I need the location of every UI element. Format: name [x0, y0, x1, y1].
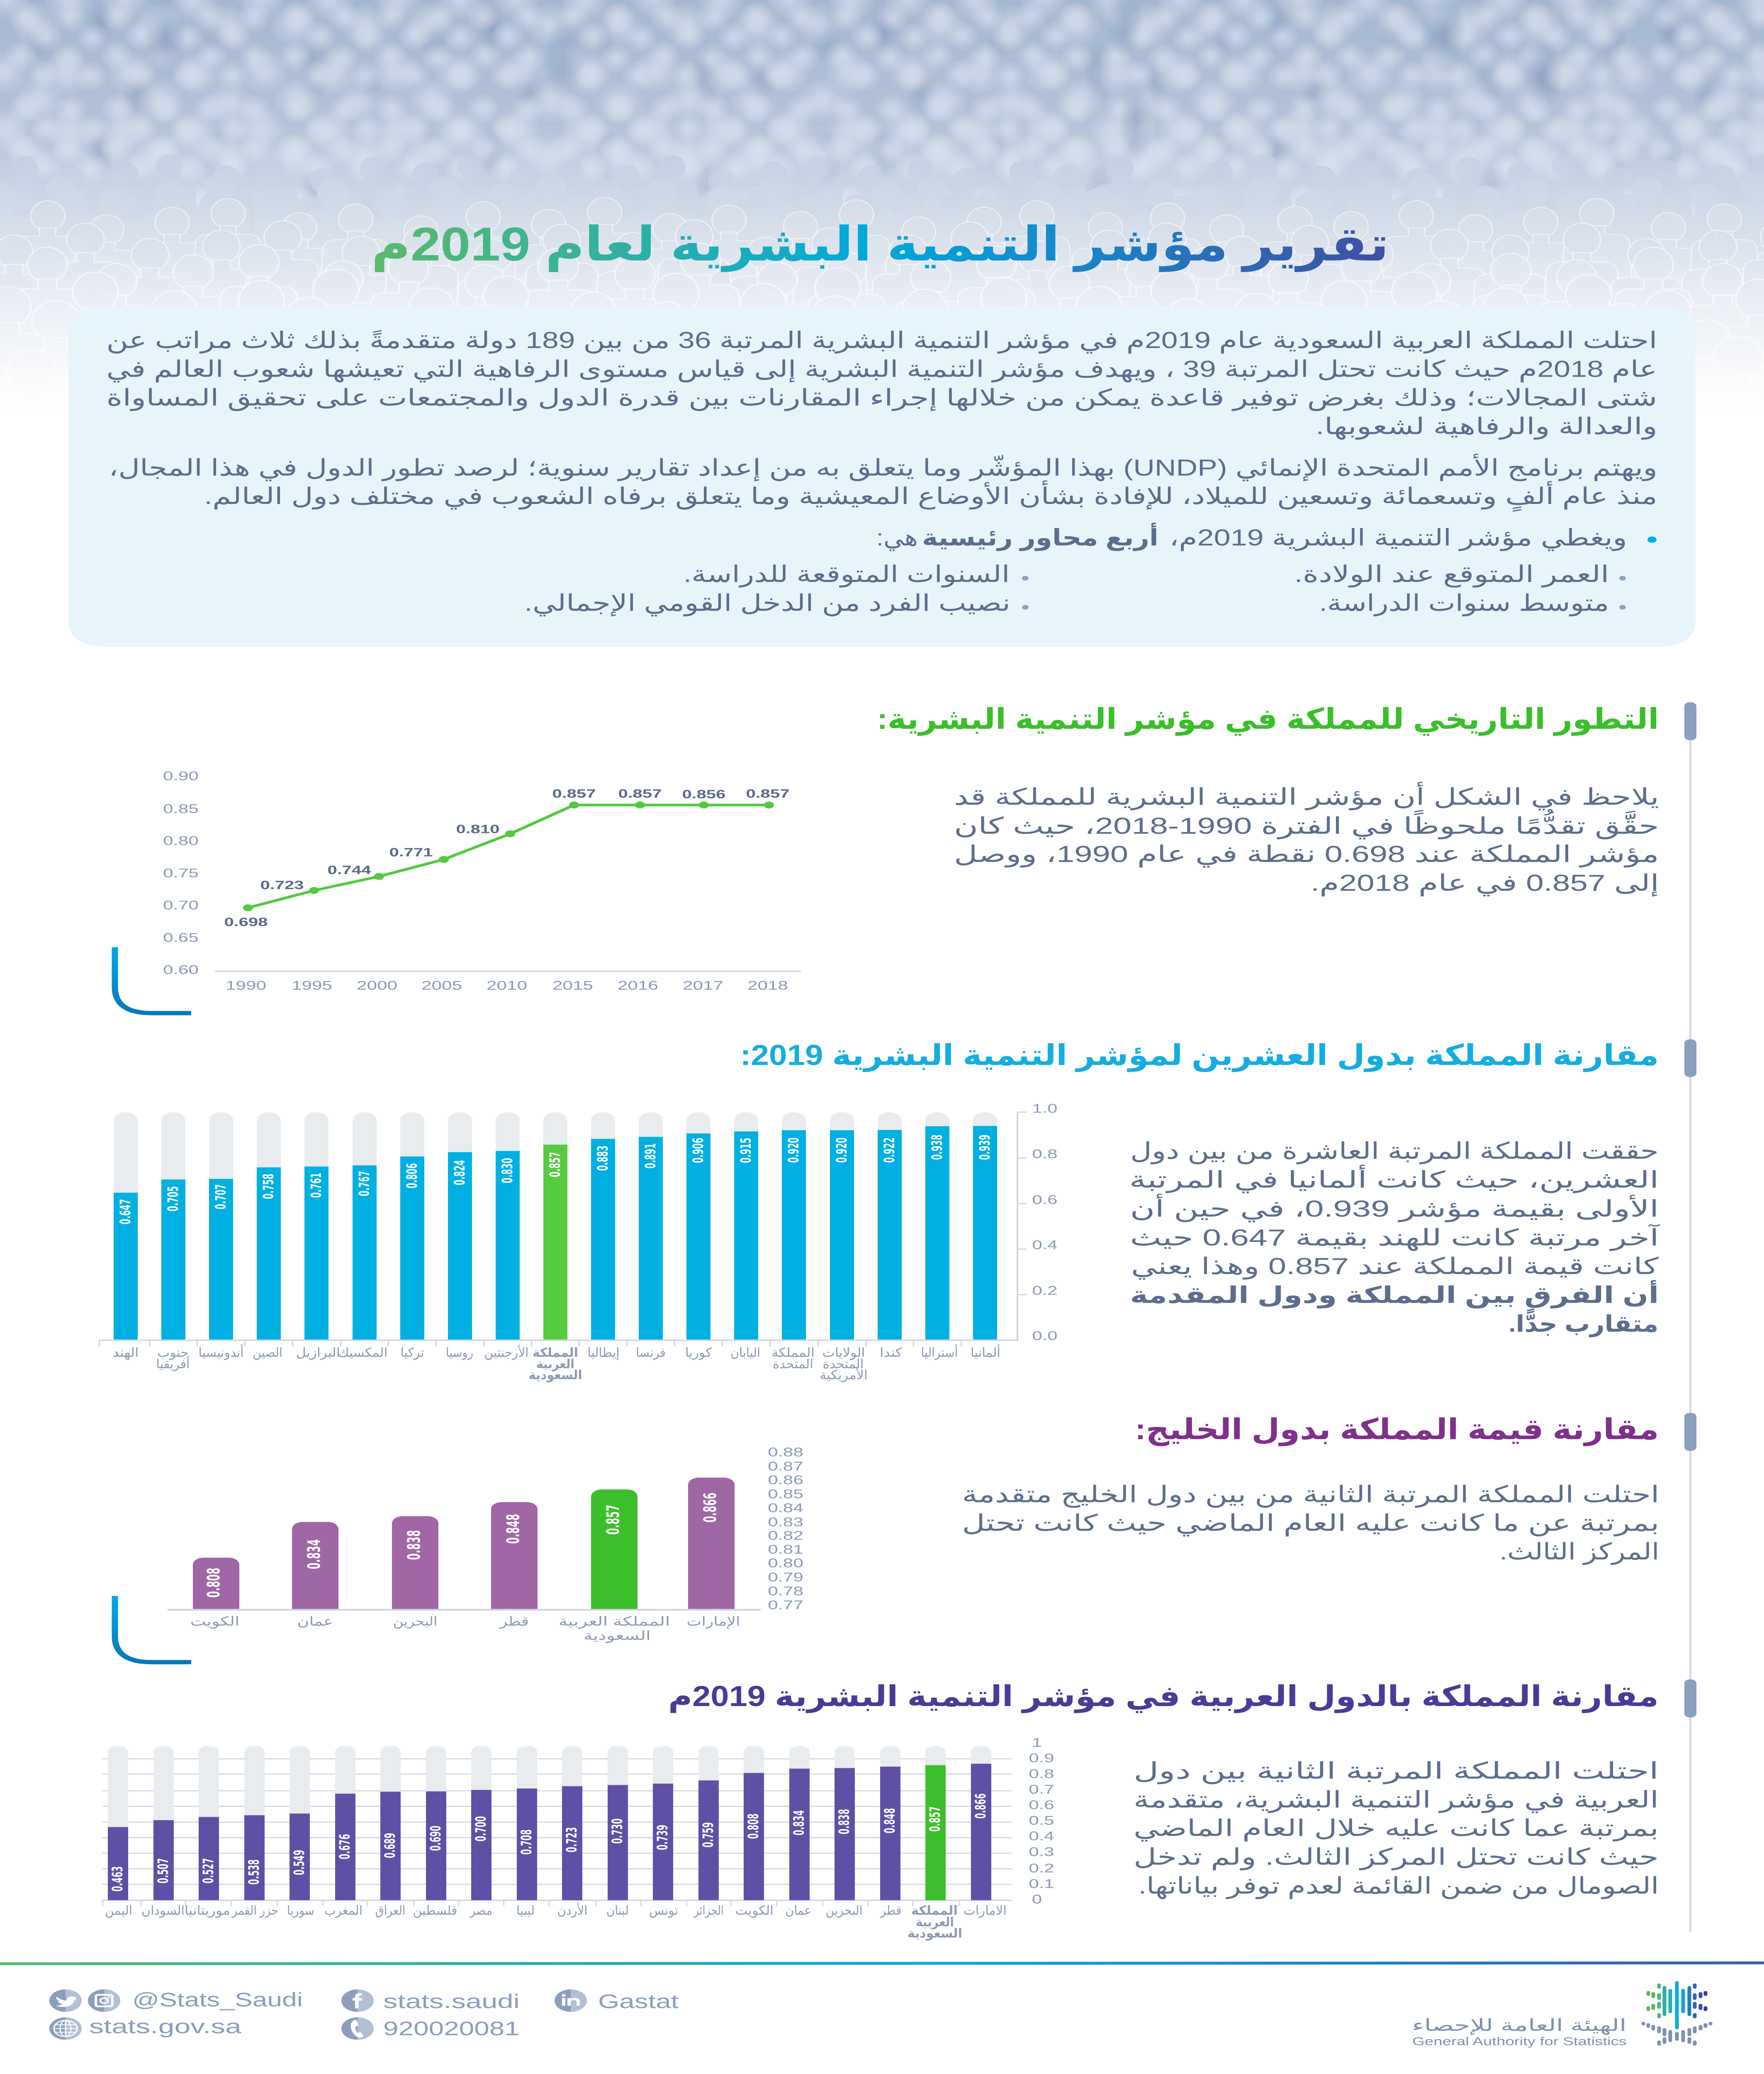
data labels — [224, 786, 790, 929]
section 4 text: الصومال من ضمن القائمة لعدم توفر بياناتها. — [1138, 1873, 1659, 1899]
country labels: المكسيك — [338, 1346, 388, 1360]
paragraph 1: احتلت المملكة العربية السعودية عام 2019م في مؤشر التنمية البشرية المرتبة 36 من بين 189 دولة متقدمةً بذلك ثلاث مراتب عن — [106, 327, 1657, 354]
section 4 text: العربية في مؤشر التنمية البشرية، متقدمة — [1134, 1787, 1659, 1813]
bar value labels: 0.730 — [609, 1818, 626, 1844]
country labels: اليابان — [730, 1346, 760, 1360]
y axis labels — [768, 1445, 803, 1612]
country labels: الكويت — [190, 1614, 239, 1629]
country labels: قطر — [499, 1614, 529, 1629]
bar value labels: 0.838 — [836, 1809, 853, 1834]
icon: phone — [341, 2017, 374, 2040]
country labels: الأمريكية — [820, 1367, 868, 1383]
bar value labels: 0.690 — [428, 1826, 444, 1851]
y axis labels: 0 — [1032, 1893, 1042, 1906]
list of four axes — [524, 561, 1626, 616]
icon: globe — [49, 2017, 82, 2040]
bar value labels: 0.723 — [564, 1827, 580, 1852]
section 4 text — [1134, 1758, 1659, 1899]
bar value labels: 0.939 — [977, 1134, 993, 1160]
y axis labels: 0.2 — [1032, 1284, 1058, 1298]
country labels: المغرب — [324, 1904, 363, 1918]
section 3 bar chart: Gulf states — [168, 1445, 803, 1643]
country labels: البحرين — [826, 1904, 863, 1918]
country labels: عمان — [786, 1904, 811, 1918]
icon: instagram — [88, 1989, 120, 2012]
country labels: المملكة العربية — [559, 1614, 670, 1629]
bar value labels: 0.915 — [738, 1138, 754, 1163]
y axis labels: 0.82 — [768, 1529, 803, 1543]
country labels: الإمارات — [687, 1614, 740, 1629]
country labels: السودان — [141, 1904, 185, 1918]
bar value labels: 0.906 — [690, 1138, 707, 1163]
country labels: قطر — [880, 1904, 901, 1918]
country labels: الأرجنتين — [484, 1344, 528, 1360]
section 2 text: آخر مرتبة كانت للهند بقيمة 0.647 حيث — [1130, 1224, 1660, 1251]
section 4 text: احتلت المملكة المرتبة الثانية بين دول — [1134, 1758, 1659, 1784]
bar value labels: 0.707 — [213, 1184, 229, 1210]
section 1 text — [954, 781, 1659, 896]
section 4 text: حيث كانت تحتل المركز الثالث. ولم تدخل — [1134, 1844, 1659, 1870]
section 2 bar chart: G20 — [99, 1102, 1058, 1383]
y axis labels: 0.5 — [1029, 1814, 1054, 1828]
country labels: الولايات — [822, 1346, 865, 1360]
section 4 marker — [1684, 1680, 1696, 1717]
text: facebook handle: stats.saudi — [383, 1991, 520, 2013]
country labels — [190, 1614, 740, 1643]
bar value labels: 0.857 — [603, 1505, 623, 1535]
icon: twitter — [49, 1989, 82, 2012]
y axis labels: 0.2 — [1029, 1862, 1054, 1876]
bar value labels: 0.938 — [929, 1134, 946, 1160]
country labels: إيطاليا — [587, 1346, 619, 1360]
bar value labels: 0.761 — [308, 1173, 325, 1198]
country labels: عمان — [297, 1614, 333, 1629]
y axis labels: 0.4 — [1029, 1829, 1054, 1843]
y axis labels: 0.6 — [1032, 1193, 1058, 1207]
country labels: العربية — [536, 1357, 574, 1371]
x axis labels: 1990 — [226, 979, 266, 993]
logo: General Authority for Statistics — [1412, 1982, 1710, 2048]
country labels: الامارات — [964, 1904, 1007, 1918]
y axis labels: 0.85 — [768, 1487, 803, 1501]
bar value labels: 0.883 — [595, 1146, 611, 1171]
bar value labels: 0.806 — [404, 1163, 421, 1188]
y axis labels: 0.4 — [1032, 1238, 1058, 1252]
section 4 bar chart: Arab states — [102, 1736, 1054, 1940]
y axis labels: 0.86 — [768, 1473, 803, 1487]
text: twitter and instagram handle: @Stats_Saudi — [132, 1989, 303, 2011]
blue corner bracket 1 — [115, 947, 191, 1013]
country labels: المملكة — [911, 1904, 958, 1918]
y axis labels: 0.77 — [768, 1598, 803, 1612]
section 2 text — [1129, 1138, 1660, 1337]
icon: facebook — [341, 1989, 374, 2012]
country labels: سوريا — [287, 1904, 314, 1918]
bar value labels: 0.891 — [642, 1143, 659, 1168]
y axis labels: 0.8 — [1029, 1767, 1054, 1781]
country labels: كندا — [880, 1346, 903, 1360]
section 2 text: الأولى بقيمة مؤشر 0.939، في حين أن — [1130, 1193, 1659, 1222]
bar value labels: 0.866 — [700, 1492, 720, 1523]
paragraph 1: شتى المجالات؛ وذلك بغرض توفير قاعدة يمكن من خلالها إجراء المقارنات بين قدرة الدول والمجتمعات على تحقيق المساواة — [107, 385, 1657, 411]
footer: social contacts — [49, 1989, 679, 2040]
section 1 marker — [1684, 702, 1696, 740]
bar value labels: 0.830 — [499, 1158, 516, 1183]
bar value labels: 0.676 — [337, 1834, 353, 1859]
section 1 text: إلى 0.857 في عام 2018م. — [1311, 870, 1659, 896]
title: تقرير مؤشر التنمية البشرية لعام 2019م — [371, 218, 1389, 272]
value bars — [114, 1126, 997, 1340]
country labels: روسيا — [446, 1346, 473, 1360]
bar value labels: 0.759 — [700, 1822, 717, 1848]
section 1 text: يلاحظ في الشكل أن مؤشر التنمية البشرية للمملكة قد — [954, 781, 1659, 811]
data labels: 0.857 — [552, 786, 596, 801]
y axis labels: 0.87 — [768, 1459, 803, 1473]
country labels: فرنسا — [636, 1346, 666, 1360]
icon: linkedin — [555, 1989, 587, 2012]
country labels: أستراليا — [921, 1344, 958, 1360]
logo Arabic name: الهيئة العامة للإحصاء — [1412, 2016, 1627, 2035]
x axis labels: 2017 — [683, 979, 723, 993]
y axis labels: 0.80 — [163, 834, 199, 848]
list of four axes: العمر المتوقع عند الولادة. — [1294, 561, 1609, 588]
y axis labels: 0.9 — [1029, 1751, 1054, 1765]
x axis labels: 2015 — [552, 979, 593, 993]
section 3 text: المركز الثالث. — [1500, 1538, 1659, 1565]
bar value labels: 0.866 — [973, 1793, 989, 1819]
country labels: الكويت — [735, 1904, 774, 1918]
country labels — [113, 1344, 1000, 1383]
country labels: تونس — [649, 1904, 678, 1918]
y axis labels: 1.0 — [1032, 1102, 1058, 1116]
section 2 text: العشرين، حيث كانت ألمانيا في المرتبة — [1129, 1164, 1659, 1193]
y axis labels — [1029, 1736, 1054, 1906]
y axis labels — [163, 769, 199, 977]
y axis labels: 0.3 — [1029, 1845, 1054, 1859]
y axis labels: 0.7 — [1029, 1783, 1054, 1796]
bar value labels: 0.808 — [203, 1568, 224, 1598]
text: linkedin handle: Gastat — [598, 1991, 679, 2013]
country labels: البحرين — [393, 1614, 437, 1629]
x axis labels: 2000 — [357, 979, 397, 993]
data labels: 0.771 — [389, 845, 433, 859]
bar value labels: 0.857 — [927, 1806, 944, 1832]
grey bar tracks — [114, 1112, 997, 1340]
bar value labels: 0.708 — [518, 1829, 535, 1855]
y axis labels: 0.6 — [1029, 1798, 1054, 1812]
country labels: المملكة — [533, 1346, 578, 1360]
bar value labels: 0.758 — [260, 1174, 277, 1199]
bar value labels: 0.538 — [246, 1859, 263, 1884]
y axis labels: 0.60 — [163, 963, 199, 977]
axes and ticks — [99, 1112, 1027, 1346]
bar value labels: 0.857 — [547, 1152, 564, 1177]
x axis labels — [226, 979, 788, 993]
country labels: الهند — [113, 1346, 139, 1360]
data labels: 0.723 — [260, 878, 304, 892]
background: crowd of people silhouettes — [0, 0, 1764, 525]
section 1 text: مؤشر المملكة عند 0.698 نقطة في عام 1990، ووصل — [954, 841, 1659, 868]
country labels: ألمانيا — [971, 1344, 1000, 1360]
section 2 marker — [1684, 1039, 1696, 1077]
country labels — [105, 1902, 1007, 1940]
country labels: جنوب — [157, 1346, 189, 1360]
bar value labels: 0.848 — [503, 1514, 523, 1544]
grey bar tracks — [108, 1746, 991, 1900]
section 2 text: كانت قيمة المملكة عند 0.857 وهذا يعني — [1131, 1254, 1659, 1280]
blue corner bracket 2 — [115, 1596, 191, 1662]
bar value labels: 0.463 — [109, 1866, 126, 1891]
bar value labels: 0.689 — [382, 1833, 399, 1858]
y axis labels: 0.85 — [163, 802, 199, 816]
list of four axes: نصيب الفرد من الدخل القومي الإجمالي. — [524, 590, 1010, 616]
country labels: الصين — [253, 1346, 282, 1360]
y axis labels: 0.90 — [163, 769, 199, 783]
bar value labels — [109, 1793, 989, 1891]
bars — [193, 1478, 735, 1609]
bar value labels — [203, 1492, 720, 1598]
country labels: مصر — [470, 1904, 492, 1918]
panel: introduction — [68, 306, 1696, 647]
country labels: موريتانيا — [185, 1904, 230, 1918]
bar value labels: 0.808 — [745, 1814, 762, 1839]
y axis labels — [1032, 1102, 1058, 1343]
y axis labels: 0.65 — [163, 931, 199, 945]
y axis labels: 0.84 — [768, 1501, 803, 1515]
section 2 text: متقارب جدًّا. — [1509, 1308, 1659, 1337]
bar value labels: 0.705 — [165, 1186, 182, 1211]
footer gradient band — [0, 1962, 1764, 1965]
y axis labels: 0.8 — [1032, 1147, 1058, 1161]
country labels: المملكة — [771, 1346, 815, 1360]
country labels: أندونيسيا — [199, 1344, 244, 1360]
x axis labels: 1995 — [292, 979, 332, 993]
text: phone number: 920020081 — [383, 2018, 520, 2040]
y axis labels: 0.0 — [1032, 1329, 1058, 1343]
bar value labels: 0.507 — [155, 1858, 172, 1884]
country labels: اليمن — [105, 1904, 132, 1918]
bullet: four main axes: ويغطي مؤشر التنمية البشرية 2019م، — [1169, 525, 1627, 551]
bar value labels: 0.700 — [473, 1816, 489, 1841]
bar value labels: 0.838 — [404, 1530, 424, 1560]
paragraph 2: ويهتم برنامج الأمم المتحدة الإنمائي (UNDP) بهذا المؤشّر وما يتعلق به من إعداد تقارير سنوية؛ لرصد تطور الدول في هذا المجال، — [109, 453, 1657, 481]
bar value labels: 0.848 — [882, 1808, 898, 1833]
y axis labels: 0.78 — [768, 1584, 803, 1598]
country labels: أفريقيا — [156, 1356, 190, 1372]
bar value labels: 0.834 — [304, 1539, 324, 1569]
logo mark — [1643, 1982, 1710, 2045]
country labels: تركيا — [401, 1346, 424, 1360]
bar value labels: 0.922 — [881, 1137, 898, 1163]
bar value labels: 0.527 — [200, 1858, 217, 1884]
text: website: stats.gov.sa — [89, 2016, 242, 2037]
list of four axes: السنوات المتوقعة للدراسة. — [683, 561, 1010, 588]
country labels: جزر القمر — [231, 1904, 278, 1918]
country labels: لبنان — [606, 1904, 629, 1918]
data labels: 0.857 — [746, 786, 790, 801]
country labels: فلسطين — [413, 1904, 457, 1918]
country labels: السعودية — [528, 1368, 582, 1382]
x axis ticks — [102, 1900, 960, 1906]
country labels: المتحدة — [773, 1357, 813, 1371]
data labels: 0.810 — [456, 822, 500, 836]
bar value labels: 0.920 — [786, 1137, 802, 1163]
paragraph 1: عام 2018م حيث كانت تحتل المرتبة 39 ، ويهدف مؤشر التنمية البشرية إلى قياس مستوى الرفاهية التي تعيشها شعوب العالم في — [106, 356, 1657, 382]
section 2 text: أن الفرق بين المملكة ودول المقدمة — [1130, 1280, 1659, 1309]
logo English name: General Authority for Statistics — [1412, 2035, 1627, 2048]
y axis labels: 0.80 — [768, 1556, 803, 1570]
section 3 text: بمرتبة عن ما كانت عليه العام الماضي حيث كانت تحتل — [962, 1510, 1659, 1536]
bar value labels: 0.767 — [356, 1171, 373, 1196]
x axis labels: 2018 — [747, 979, 788, 993]
paragraph 2 — [109, 453, 1657, 512]
country labels: السعودية — [908, 1926, 962, 1940]
paragraph 1 — [106, 327, 1657, 440]
data labels: 0.698 — [224, 915, 268, 929]
bar value labels: 0.824 — [452, 1160, 468, 1185]
vertical timeline line — [1689, 702, 1691, 1932]
bar value labels: 0.647 — [117, 1199, 134, 1224]
section 3 text — [962, 1481, 1659, 1565]
bar value labels: 0.920 — [834, 1137, 850, 1163]
data labels: 0.744 — [327, 863, 371, 876]
list of four axes: متوسط سنوات الدراسة. — [1319, 590, 1609, 616]
country labels: البرازيل — [296, 1346, 340, 1360]
y axis labels: 0.88 — [768, 1445, 803, 1459]
x axis labels: 2010 — [487, 979, 527, 993]
country labels: الأردن — [557, 1902, 588, 1918]
country labels: المتحدة — [823, 1357, 864, 1371]
bullet: four main axes: هي: — [876, 525, 918, 551]
country labels: العربية — [916, 1915, 954, 1929]
section 4 text: بمرتبة عما كانت عليه خلال العام الماضي — [1134, 1815, 1659, 1842]
y axis labels: 0.70 — [163, 898, 199, 913]
section 3 marker — [1684, 1413, 1696, 1451]
country labels: كوريا — [685, 1346, 712, 1360]
data labels: 0.856 — [682, 787, 726, 801]
country labels: السعودية — [584, 1629, 651, 1643]
y axis labels: 0.75 — [163, 866, 199, 880]
bullet: four main axes: أربع محاور رئيسية — [922, 522, 1158, 551]
section 1 line chart — [163, 769, 801, 993]
bar value labels: 0.739 — [655, 1825, 671, 1850]
bar value labels — [117, 1134, 993, 1224]
y axis labels: 0.1 — [1029, 1877, 1054, 1891]
y axis labels: 0.81 — [768, 1543, 803, 1557]
paragraph 2: منذ عام ألفٍ وتسعمائة وتسعين للميلاد، للإفادة بشأن الأوضاع المعيشية وما يتعلق برفاه الشعوب في مختلف دول العالم. — [204, 480, 1657, 512]
country labels: ليبيا — [516, 1904, 535, 1918]
grid lines — [102, 1758, 1012, 1901]
y axis labels: 1 — [1032, 1736, 1042, 1750]
bullet: four main axes — [876, 522, 1657, 551]
data labels: 0.857 — [618, 786, 662, 801]
section 2 text: حققت المملكة المرتبة العاشرة من بين دول — [1130, 1138, 1659, 1164]
bar value labels: 0.834 — [791, 1810, 808, 1835]
x axis labels: 2016 — [618, 979, 658, 993]
country labels: الجزائر — [693, 1904, 724, 1918]
paragraph 1: والعدالة والرفاهية لشعوبها. — [1316, 413, 1657, 440]
y axis labels: 0.83 — [768, 1515, 803, 1529]
bar value labels: 0.549 — [291, 1850, 308, 1875]
value bars — [108, 1764, 991, 1900]
country labels: العراق — [375, 1904, 406, 1918]
section 3 text: احتلت المملكة المرتبة الثانية من بين دول الخليج متقدمة — [962, 1481, 1659, 1508]
section 1 text: حقَّق تقدُّمًا ملحوظًا في الفترة 1990-2018، حيث كان — [954, 809, 1659, 840]
x axis labels: 2005 — [421, 979, 462, 993]
data line — [243, 801, 774, 911]
y axis labels: 0.79 — [768, 1570, 803, 1585]
